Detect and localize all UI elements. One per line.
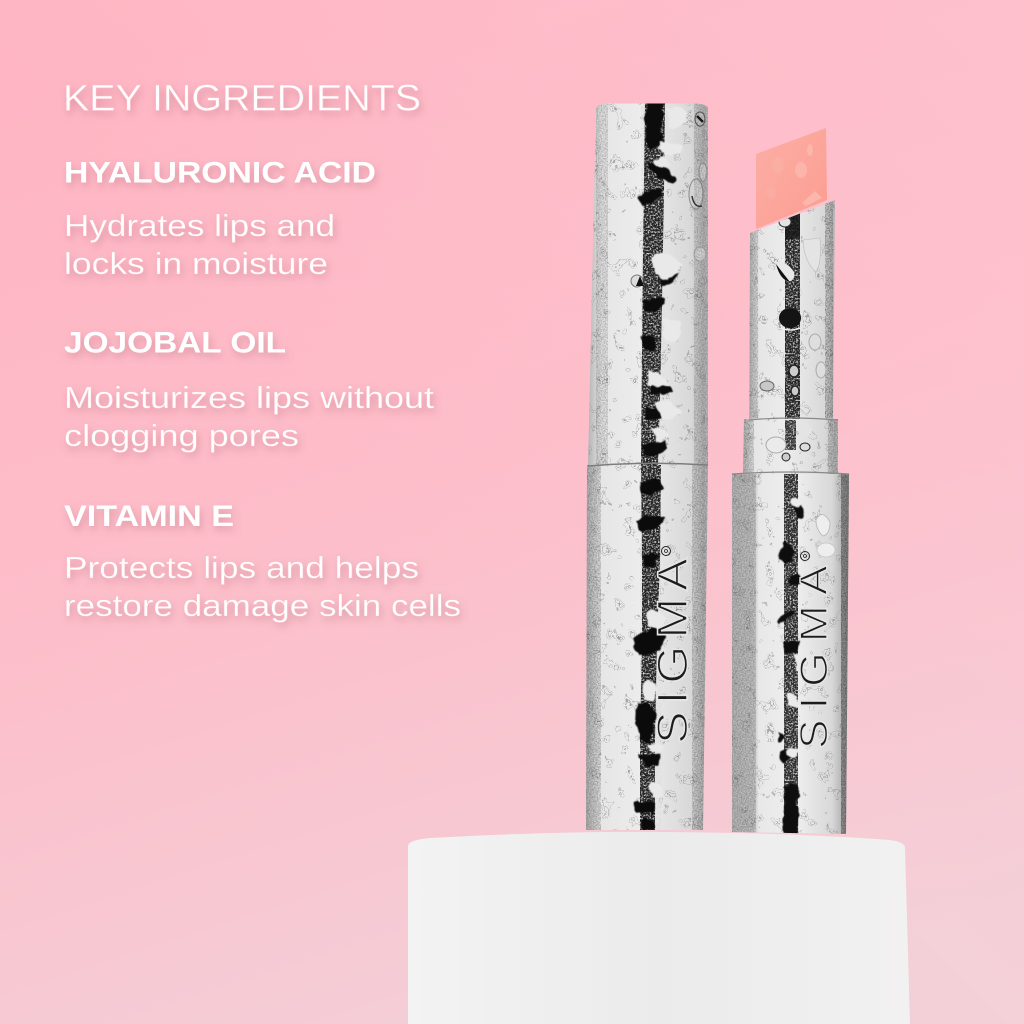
tube cap [586,100,710,468]
brand name: sigma: SIGMA [792,565,835,749]
tube seam [588,463,708,466]
ingredient description: vitamin e: restore damage skin cells [64,588,461,623]
pink balm bullet [756,128,827,229]
panel: ingredient text [63,78,461,623]
balm seam lines [732,418,849,474]
cap black reflections [638,100,678,457]
registered mark [662,546,670,556]
ingredient description: hyaluronic acid: Hydrates lips and [64,208,335,243]
balm inner tube [748,198,838,422]
open lip balm [730,128,850,836]
tube base [585,464,710,832]
base droplets [777,505,805,836]
ingredient description: vitamin e [64,550,461,623]
inner tube droplets [776,262,794,282]
ingredient description: jojobal oil: Moisturizes lips without [64,380,434,415]
closed silver tube [585,100,710,832]
registered mark [800,552,810,560]
ingredient description: hyaluronic acid [64,208,335,281]
ingredient heading: jojobal oil: JOJOBAL OIL [64,326,286,360]
ingredient heading: hyaluronic acid: HYALURONIC ACID [64,156,376,190]
balm collar [742,418,840,476]
cap white droplets [648,106,685,442]
base black reflections [633,478,665,830]
base white droplets [642,611,667,798]
heading: key ingredients: KEY INGREDIENTS [63,78,421,118]
ingredient description: jojobal oil: clogging pores [64,418,299,453]
ingredient description: vitamin e: Protects lips and helps [64,550,419,585]
white pedestal [408,832,910,1024]
balm base [730,472,850,836]
brand name: sigma: SIGMA [648,558,696,744]
cap edge droplets [631,112,707,287]
ingredient description: hyaluronic acid: locks in moisture [64,246,328,281]
ingredient description: jojobal oil [64,380,434,453]
ingredient heading: vitamin e: VITAMIN E [64,500,234,533]
